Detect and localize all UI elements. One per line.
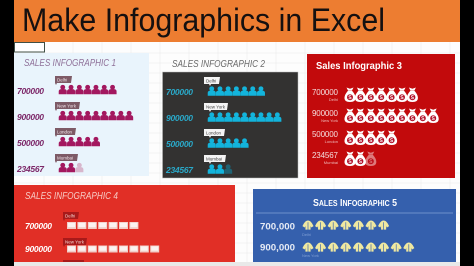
dark panel background [162,72,298,178]
row: New York: 900000 [25,244,52,254]
row: Mumbai: Mumbai [324,160,338,165]
row: Delhi: 700000 [17,86,44,96]
row: London: London [57,130,73,134]
row: Delhi: 700,000 [260,222,295,232]
row: Delhi: Delhi [302,232,311,237]
row: Delhi [25,212,138,231]
tag: London (cropped) [63,260,84,262]
row: London: 500000 [312,130,339,139]
row: Mumbai: 234567 [16,164,45,174]
heading 4: SALES INFOGRAPHIC 4 [25,191,118,202]
row: Delhi: Delhi [206,78,216,84]
panel: sales infographic 3 [307,54,455,178]
row: New York: New York [321,118,338,123]
row: Mumbai [16,154,83,174]
heading 5: SALES INFOGRAPHIC 5 [313,198,397,209]
row: Mumbai: 234567 [312,151,339,160]
row: Delhi [166,77,265,97]
row: London [17,128,100,148]
row: London: London [206,130,222,136]
row: London [166,129,249,149]
row: New York: New York [206,104,226,110]
row: Mumbai: 234567 [165,165,194,175]
sheet scroll bar [14,262,460,266]
panel: sales infographic 5 [253,189,456,262]
row: Mumbai: Mumbai [206,156,222,162]
row: London: London [325,139,338,144]
row: Delhi: Delhi [329,97,338,102]
divider [256,212,453,214]
row: Mumbai [312,151,376,166]
row: New York: New York [65,240,85,244]
row: New York: 900,000 [260,242,295,254]
row: London: 500000 [17,138,44,148]
heading 3: Sales Infographic 3 [316,60,402,72]
row: New York [260,242,414,258]
row: Delhi [260,221,389,237]
row: Mumbai [165,155,232,175]
heading 2: SALES INFOGRAPHIC 2 [172,59,265,70]
heading 1: SALES INFOGRAPHIC 1 [24,58,116,69]
title banner: Make Infographics in Excel [22,2,385,38]
row: Delhi: Delhi [57,78,67,82]
row: New York [17,102,133,122]
row: New York [312,108,439,123]
row: London [312,130,397,145]
row: Mumbai: Mumbai [57,156,73,160]
row: New York [166,103,281,123]
row: New York: 900000 [166,113,193,123]
row: New York: New York [302,253,319,258]
row: Delhi: 700000 [312,88,339,97]
row: New York: 900000 [312,109,339,118]
panel: sales infographic 2 [162,59,298,178]
row: Delhi: Delhi [65,214,75,218]
row: New York: New York [57,104,77,108]
row: Delhi: 700000 [25,221,52,231]
row: Delhi: 700000 [166,87,193,97]
row: New York: 900000 [17,112,44,122]
row: Delhi [17,76,117,96]
row: Delhi [312,88,418,102]
spreadsheet background [14,42,460,266]
row: London: 500000 [166,139,193,149]
panel: sales infographic 1 [14,53,149,176]
row: New York [25,238,159,254]
panel: sales infographic 4 [14,185,235,262]
